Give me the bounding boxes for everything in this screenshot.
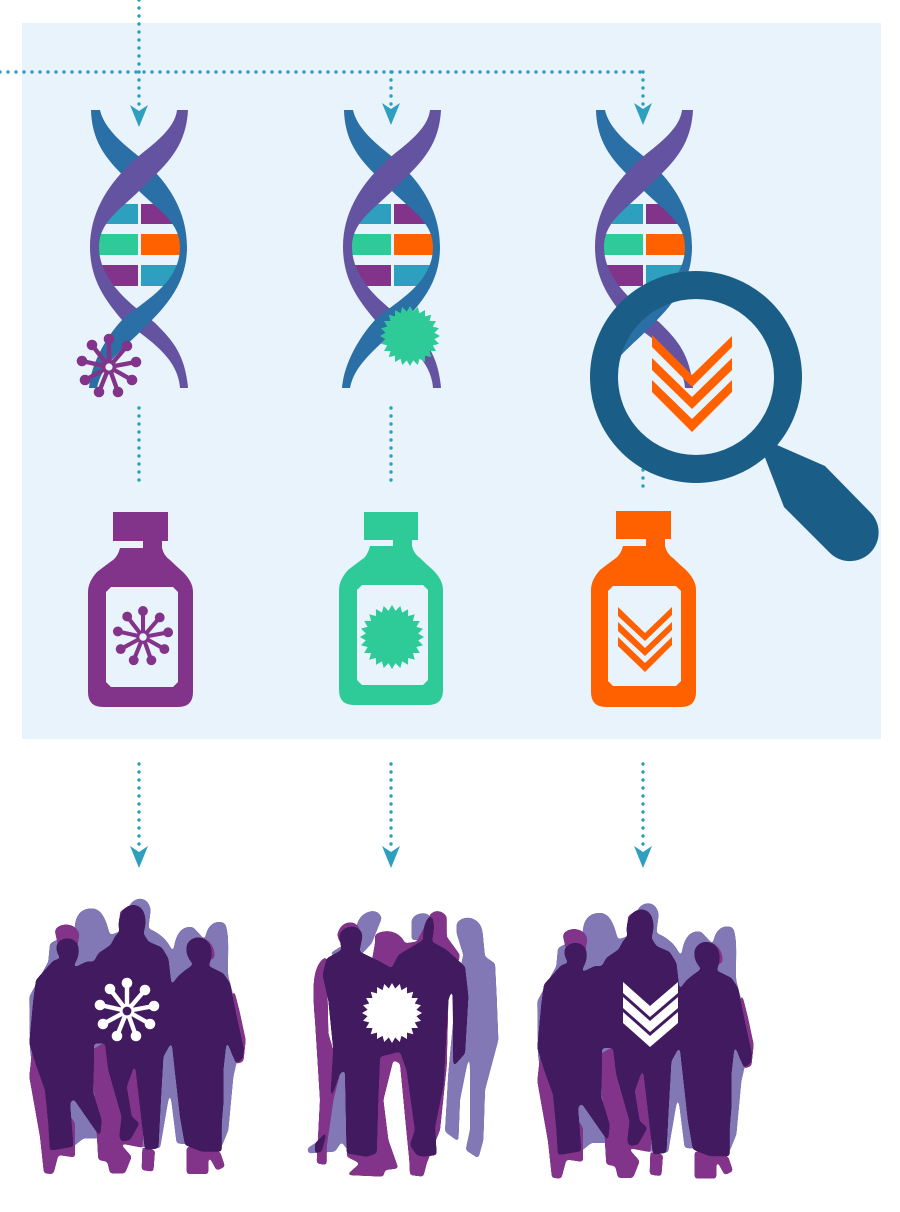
icon: orange chevrons in lens [652, 335, 732, 432]
icon: starburst mutation on DNA 2 [380, 296, 450, 369]
people group 1 [29, 899, 246, 1174]
icon: white starburst on people 2 [362, 973, 432, 1046]
arrowheads into people [130, 846, 652, 868]
icon: chevrons on bottle 3 [618, 607, 672, 672]
connector: bottle to people dotted lines [139, 764, 643, 850]
DNA helix 1 with virus mutation [77, 110, 188, 397]
DNA helix 3 under magnifier [594, 110, 693, 388]
people group 2 [307, 911, 498, 1177]
icon: starburst on bottle 2 [360, 595, 434, 672]
panel: light blue background [22, 23, 881, 739]
icon: magnifying glass [604, 285, 879, 561]
icon: white chevrons on people 3 [623, 982, 678, 1047]
bottle 3: orange with chevron label [591, 511, 696, 707]
DNA helix 2 with starburst mutation [342, 110, 450, 388]
icon: virus mutation on DNA 1 [77, 334, 141, 397]
people group 3 [537, 903, 754, 1178]
arrow: top input dotted lines [0, 0, 643, 105]
icon: virus on bottle 1 [113, 606, 173, 665]
icon: white virus on people 1 [95, 978, 159, 1041]
connector: DNA to bottle dotted lines [139, 408, 643, 488]
bottle 2: green with starburst label [339, 512, 443, 705]
bottle 1: purple with virus label [88, 512, 193, 707]
arrowheads into DNA [130, 103, 652, 127]
